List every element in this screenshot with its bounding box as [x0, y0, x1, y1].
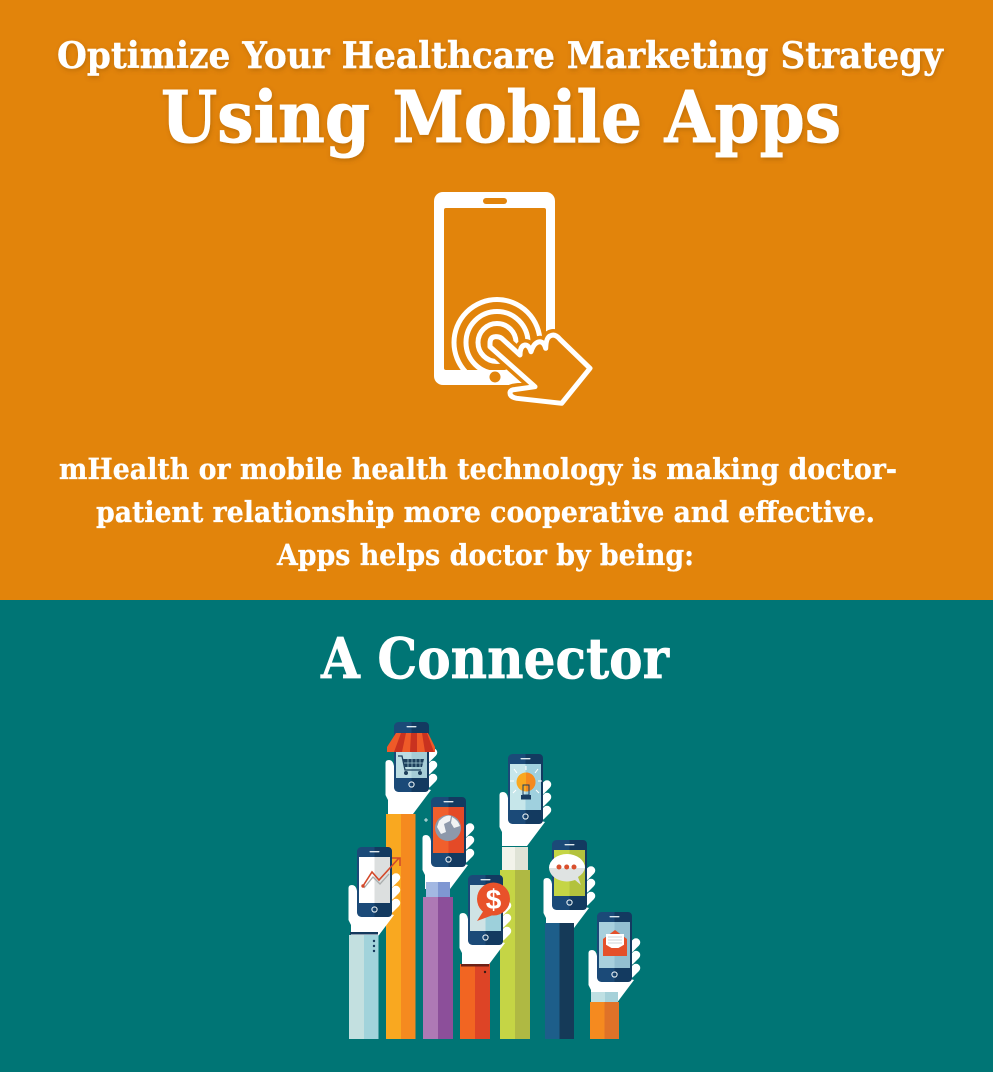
hand: dollar phone, red sleeve [460, 875, 510, 1039]
hand: shopping cart phone, orange sleeve [386, 722, 435, 1039]
title line 1: Optimize Your Healthcare Marketing Strategy [57, 35, 944, 77]
hand: envelope phone, orange short sleeve [588, 912, 636, 1039]
panel: teal connector section [0, 600, 993, 1072]
heading: A Connector: A Connector [320, 626, 670, 692]
title line 2: Using Mobile Apps [161, 75, 841, 159]
hand: chat bubble phone, navy sleeve [544, 840, 591, 1039]
intro text line 3: Apps helps doctor by being: [276, 538, 694, 572]
panel: orange header [0, 0, 993, 600]
intro text line 1: mHealth or mobile health technology is making doctor- [59, 452, 897, 486]
hand: globe phone, purple sleeve [422, 797, 470, 1039]
intro text line 2: patient relationship more cooperative and effective. [96, 495, 875, 529]
dollar sign: $ [486, 884, 502, 915]
hand: light bulb phone, green sleeve [500, 754, 547, 1039]
icon: phone with tapping hand [434, 192, 590, 403]
illustration: raised hands holding phones [348, 722, 636, 1039]
hand: chart phone, light blue sleeve [348, 847, 400, 1039]
